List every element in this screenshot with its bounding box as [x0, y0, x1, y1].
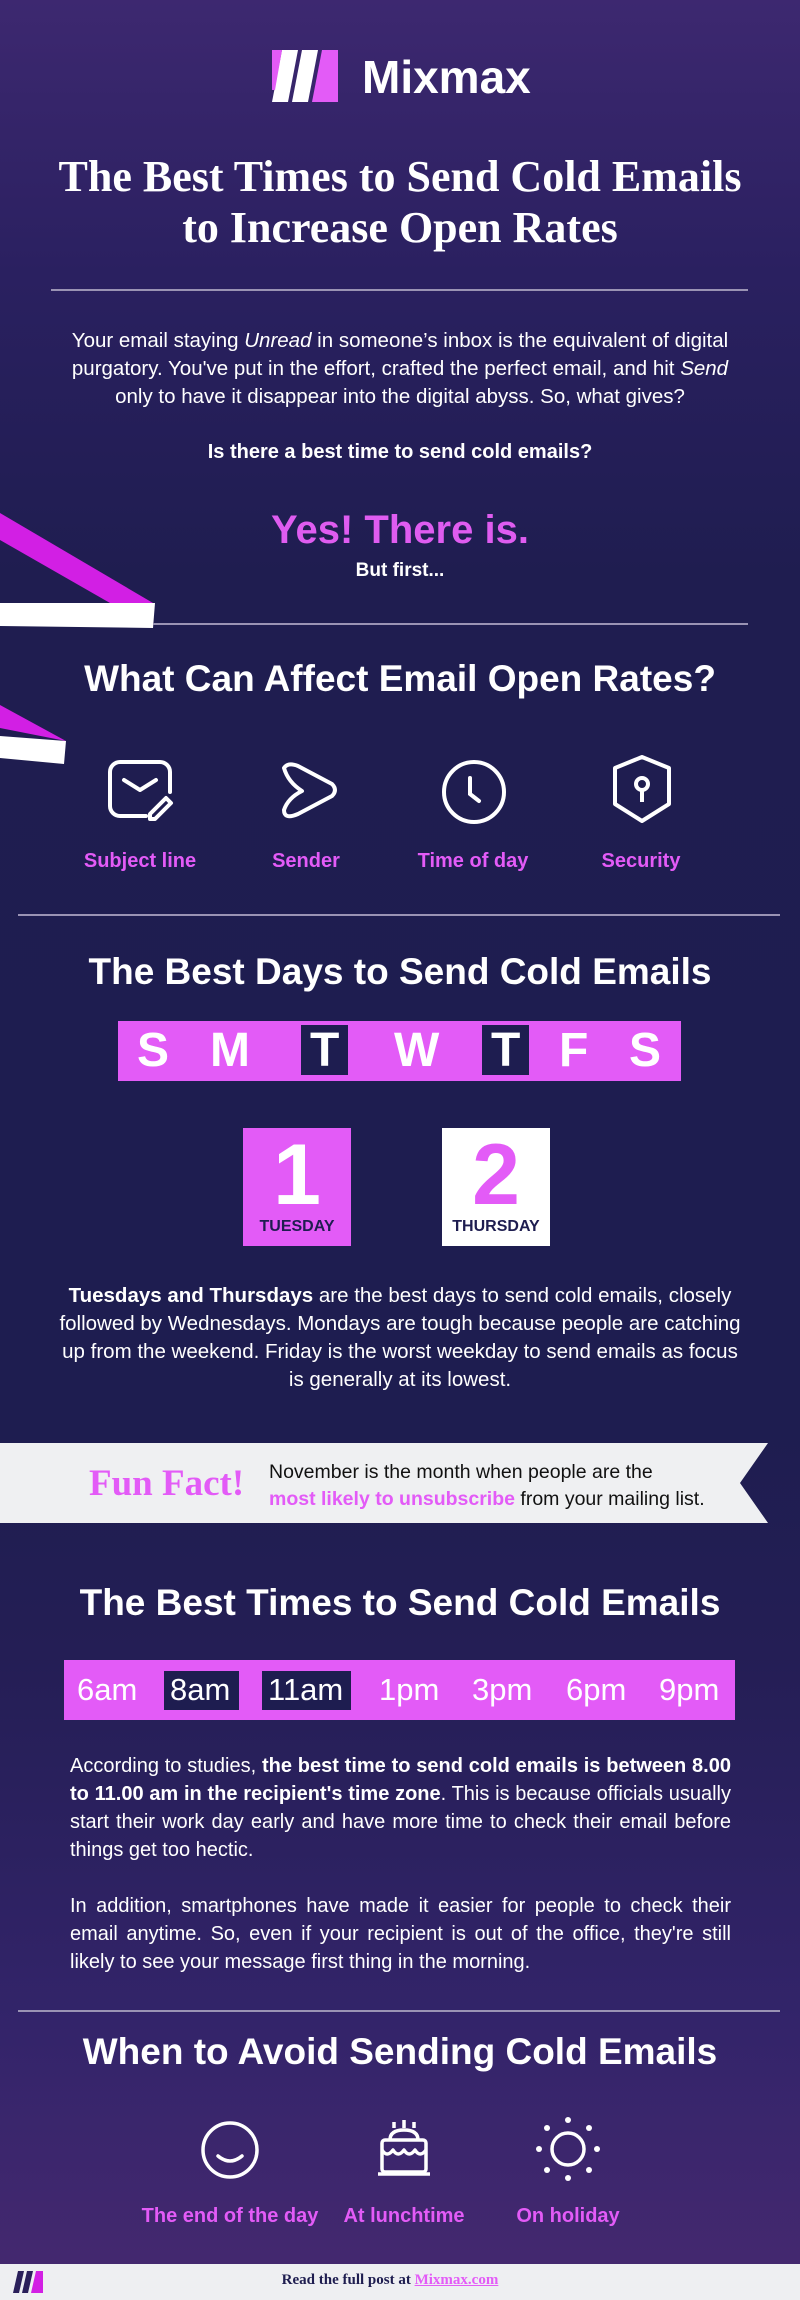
- fun fact banner: most likely to unsubscribe from your mailing list.: [269, 1488, 705, 1510]
- days bar: [118, 1021, 681, 1081]
- days text: Tuesdays and Thursdays are the best days to send cold emails, closely: [69, 1284, 731, 1307]
- times bar: 6pm: [566, 1672, 626, 1707]
- icon: sender: [282, 762, 337, 818]
- times bar: 8am: [170, 1672, 230, 1707]
- times text: [70, 1755, 731, 1973]
- heading: avoid: When to Avoid Sending Cold Emails: [83, 2031, 717, 2072]
- avoid icons: [142, 2117, 620, 2227]
- times bar: 9pm: [659, 1672, 719, 1707]
- times text: In addition, smartphones have made it easier for people to check their email anytime. So, even if your recipient is out of the office, they're still likely to see your message first thing in the morning.: [70, 1895, 731, 1973]
- icon: time: [442, 760, 506, 824]
- icons: factors: Sender: [272, 850, 340, 872]
- rank 2: thursday: THURSDAY: [452, 1218, 540, 1235]
- times bar: [64, 1660, 735, 1720]
- times bar: 6am: [77, 1672, 137, 1707]
- intro text: only to have it disappear into the digital abyss. So, what gives?: [115, 385, 685, 408]
- fun fact banner: [0, 1443, 768, 1523]
- title: The Best Times to Send Cold Emails: [59, 152, 741, 201]
- days bar: S: [137, 1024, 169, 1077]
- icon: cake: [378, 2120, 430, 2176]
- icon: smile: [201, 2121, 259, 2179]
- times bar: 11am: [268, 1672, 343, 1707]
- days bar: T: [491, 1024, 520, 1077]
- days bar: T: [310, 1024, 339, 1077]
- labels: Subject line: [84, 850, 196, 872]
- rank 1: tuesday: TUESDAY: [260, 1218, 334, 1235]
- days text: up from the weekend. Friday is the worst weekday to send emails as focus: [62, 1340, 738, 1363]
- rank 2: thursday: [442, 1128, 550, 1246]
- labels: The end of the day: [142, 2205, 318, 2227]
- days bar: W: [394, 1024, 439, 1077]
- intro text: Your email staying Unread in someone’s inbox is the equivalent of digital: [72, 329, 728, 352]
- answer: Yes! There is.: [271, 508, 529, 552]
- rank 2: thursday: 2: [472, 1127, 520, 1223]
- heading: best times: The Best Times to Send Cold Emails: [80, 1582, 720, 1623]
- fun fact banner: November is the month when people are the: [269, 1461, 653, 1483]
- icon: security: [613, 755, 671, 823]
- times bar: 1pm: [379, 1672, 439, 1707]
- icon: subject line: [108, 760, 174, 821]
- logo: [272, 50, 531, 103]
- avoid icons: At lunchtime: [343, 2205, 465, 2227]
- intro text: [72, 329, 729, 408]
- footer: [0, 2264, 800, 2300]
- days bar: F: [559, 1024, 588, 1077]
- avoid icons: On holiday: [516, 2205, 620, 2227]
- days bar: S: [629, 1024, 661, 1077]
- days bar: M: [210, 1024, 250, 1077]
- intro text: purgatory. You've put in the effort, crafted the perfect email, and hit Send: [72, 357, 728, 380]
- title: to Increase Open Rates: [182, 203, 618, 252]
- days text: followed by Wednesdays. Mondays are tough because people are catching: [59, 1312, 741, 1335]
- rank 1: tuesday: [243, 1128, 351, 1246]
- times text: According to studies, the best time to send cold emails is between 8.00 to 11.00 am in the recipient's time zone. This is because officials usually start their work day early and have more time to check their email before things get too hectic.: [70, 1755, 731, 1861]
- times bar: 3pm: [472, 1672, 532, 1707]
- heading: best days: The Best Days to Send Cold Emails: [88, 951, 711, 992]
- days text: [59, 1284, 741, 1391]
- icons: factors: [84, 755, 680, 872]
- rank 1: tuesday: 1: [273, 1127, 321, 1223]
- days text: is generally at its lowest.: [289, 1368, 511, 1391]
- question: Is there a best time to send cold emails?: [208, 441, 592, 463]
- icons: factors: Time of day: [418, 850, 528, 872]
- footer logo: [13, 2271, 43, 2293]
- decorative stripes: [0, 513, 155, 764]
- footer text: Read the full post at Mixmax.com: [282, 2272, 498, 2288]
- title: [59, 152, 741, 252]
- icon: sun: [536, 2117, 600, 2181]
- icons: factors: Security: [602, 850, 680, 872]
- fun fact banner: Fun Fact!: [89, 1463, 244, 1504]
- text: But first...: [356, 560, 444, 581]
- heading: factors: What Can Affect Email Open Rates?: [84, 658, 716, 699]
- logo: Mixmax: [362, 51, 531, 103]
